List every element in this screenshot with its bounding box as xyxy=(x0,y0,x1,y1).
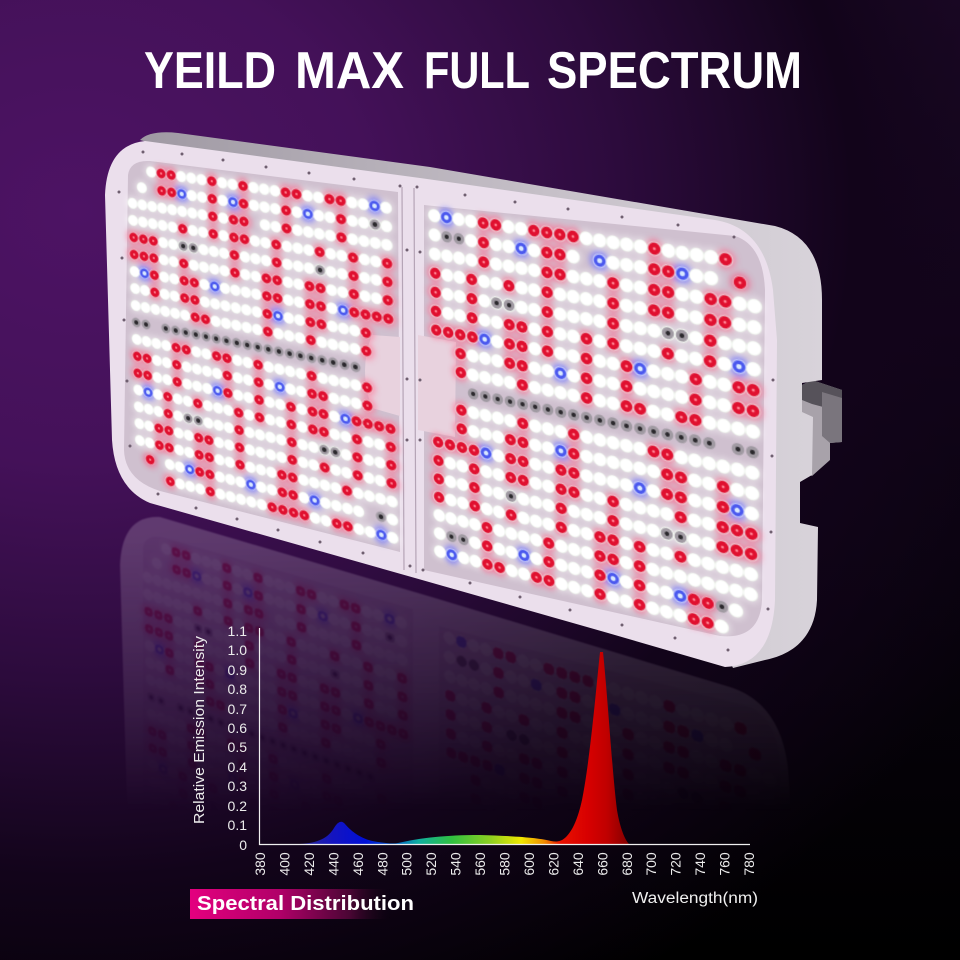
y axis tick labels: 0.4 xyxy=(228,759,247,775)
y axis tick labels xyxy=(228,623,247,853)
unlit LEDs xyxy=(447,237,755,614)
y axis tick labels: 1.1 xyxy=(228,623,247,639)
title xyxy=(144,42,802,100)
title: YEILD xyxy=(144,42,276,100)
x axis tick labels: 680 xyxy=(619,852,635,876)
x axis tick labels: 500 xyxy=(399,852,415,876)
x axis tick labels: 660 xyxy=(594,852,610,876)
x axis tick labels: 400 xyxy=(276,852,292,876)
x axis tick labels: 720 xyxy=(668,852,684,876)
front face of housing xyxy=(105,141,777,667)
x axis tick labels: 600 xyxy=(521,852,537,876)
y axis tick labels: 0.8 xyxy=(228,681,247,697)
x axis tick labels: 740 xyxy=(692,852,708,876)
y axis tick labels: 0.5 xyxy=(228,739,247,755)
x axis tick labels: 580 xyxy=(496,852,512,876)
y axis tick labels: 0.3 xyxy=(228,778,247,794)
x axis tick labels: 560 xyxy=(472,852,488,876)
red LEDs xyxy=(434,216,755,634)
spectral distribution banner: Spectral Distribution xyxy=(197,893,414,915)
spectrum curve xyxy=(300,652,629,844)
x axis tick labels: 520 xyxy=(423,852,439,876)
white LEDs xyxy=(434,216,756,634)
side wall of housing xyxy=(140,132,822,668)
y axis tick labels: 0 xyxy=(239,837,247,853)
title: MAX xyxy=(295,42,404,100)
x axis tick labels: 760 xyxy=(717,852,733,876)
y axis title: Relative Emission Intensity xyxy=(191,635,208,824)
blue LEDs xyxy=(446,218,740,630)
white LEDs xyxy=(131,169,393,538)
title: SPECTRUM xyxy=(547,42,802,100)
x axis tick labels: 640 xyxy=(570,852,586,876)
blue LEDs xyxy=(141,170,381,535)
mounting handle xyxy=(802,380,842,476)
x axis tick labels: 480 xyxy=(374,852,390,876)
LED glow xyxy=(131,169,393,538)
x axis tick labels: 700 xyxy=(643,852,659,876)
x axis tick labels: 780 xyxy=(741,852,757,876)
y axis tick labels: 0.7 xyxy=(228,701,247,717)
axes xyxy=(260,628,750,844)
LED glow xyxy=(434,216,756,634)
x axis tick labels: 540 xyxy=(448,852,464,876)
y axis tick labels: 0.9 xyxy=(228,662,247,678)
x axis tick labels: 380 xyxy=(252,852,268,876)
panel: left LED board xyxy=(124,163,403,547)
x axis tick labels: 420 xyxy=(301,852,317,876)
reflection of the light on the floor xyxy=(120,516,785,763)
spectral distribution chart xyxy=(191,623,758,907)
y axis tick labels: 0.6 xyxy=(228,720,247,736)
x axis tick labels: 620 xyxy=(545,852,561,876)
x axis title: Wavelength(nm) xyxy=(632,890,758,907)
x axis tick labels: 460 xyxy=(350,852,366,876)
x axis tick labels xyxy=(252,852,757,876)
y axis tick labels: 1.0 xyxy=(228,642,247,658)
y axis tick labels: 0.2 xyxy=(228,798,247,814)
x axis tick labels: 440 xyxy=(325,852,341,876)
title: FULL xyxy=(424,42,530,100)
unlit LEDs xyxy=(132,186,381,517)
panel: right LED board xyxy=(424,204,767,636)
y axis tick labels: 0.1 xyxy=(228,817,247,833)
red LEDs xyxy=(132,169,393,538)
spectral distribution banner xyxy=(190,889,414,919)
